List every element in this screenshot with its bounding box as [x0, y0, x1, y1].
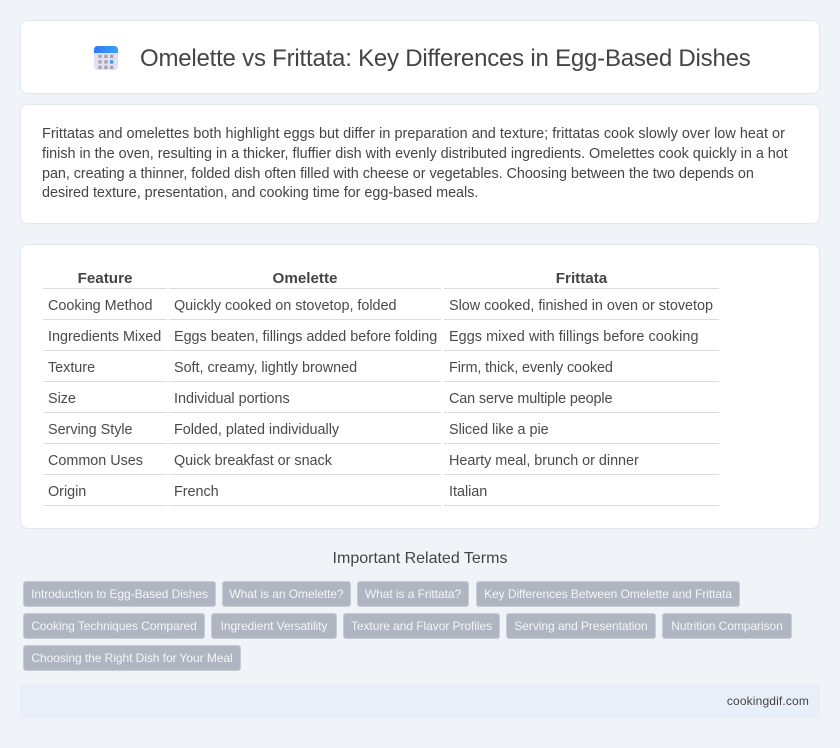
table header: Feature	[78, 270, 132, 287]
related terms tags: Texture and Flavor Profiles	[351, 619, 492, 633]
panel: introduction	[20, 104, 820, 224]
related terms tags: What is an Omelette?	[229, 587, 344, 601]
comparison table	[43, 270, 719, 506]
related terms tags: Serving and Presentation	[514, 619, 648, 633]
comparison table: Ingredients Mixed	[48, 329, 161, 345]
related terms tags: Nutrition Comparison	[671, 619, 783, 633]
table header	[78, 270, 608, 287]
footer bar	[20, 684, 820, 718]
comparison table: Eggs mixed with fillings before cooking	[449, 329, 699, 345]
comparison table: Quickly cooked on stovetop, folded	[174, 298, 397, 314]
intro text	[42, 126, 788, 201]
panel: title header	[20, 20, 820, 94]
comparison table: Common Uses	[48, 453, 143, 469]
related terms tags: Ingredient Versatility	[221, 619, 327, 633]
icon: calendar	[94, 46, 118, 70]
panel: comparison table	[20, 244, 820, 529]
related terms tags: Introduction to Egg-Based Dishes	[31, 587, 208, 601]
comparison table: French	[174, 484, 219, 500]
comparison table: Firm, thick, evenly cooked	[449, 360, 613, 376]
related terms tags: What is a Frittata?	[365, 587, 461, 601]
comparison table: Hearty meal, brunch or dinner	[449, 453, 639, 469]
comparison table: Individual portions	[174, 391, 290, 407]
comparison table: Italian	[449, 484, 487, 500]
related terms tags: Choosing the Right Dish for Your Meal	[31, 651, 233, 665]
comparison table: Quick breakfast or snack	[174, 453, 332, 469]
comparison table: Texture	[48, 360, 95, 376]
intro text: finish in the oven, resulting in a thicker, fluffier dish with evenly distributed ingredients. Omelettes cook quickly in a hot	[42, 146, 788, 162]
comparison table: Sliced like a pie	[449, 422, 549, 438]
related terms tags: Cooking Techniques Compared	[31, 619, 197, 633]
intro text: pan, creating a thinner, folded dish often filled with cheese or vegetables. Choosing between the two depends on	[42, 166, 754, 182]
comparison table: Origin	[48, 484, 86, 500]
intro text: Frittatas and omelettes both highlight eggs but differ in preparation and texture; frittatas cook slowly over low heat or	[42, 126, 785, 142]
title: Omelette vs Frittata: Key Differences in Egg-Based Dishes	[140, 45, 751, 72]
comparison table: Soft, creamy, lightly browned	[174, 360, 357, 376]
related terms heading: Important Related Terms	[333, 550, 507, 567]
comparison table: Serving Style	[48, 422, 133, 438]
comparison table: Can serve multiple people	[449, 391, 612, 407]
footer credit: cookingdif.com	[727, 694, 809, 708]
comparison table: Size	[48, 391, 76, 407]
comparison table: Cooking Method	[48, 298, 153, 314]
intro text: desired texture, presentation, and cooking time for egg-based meals.	[42, 185, 478, 201]
table header: Frittata	[556, 270, 607, 287]
table header: Omelette	[272, 270, 338, 287]
related terms tags: Key Differences Between Omelette and Frittata	[484, 587, 732, 601]
comparison table: Eggs beaten, fillings added before folding	[174, 329, 437, 345]
comparison table: Slow cooked, finished in oven or stovetop	[449, 298, 713, 314]
comparison table: Folded, plated individually	[174, 422, 339, 438]
related terms tags	[23, 581, 792, 671]
